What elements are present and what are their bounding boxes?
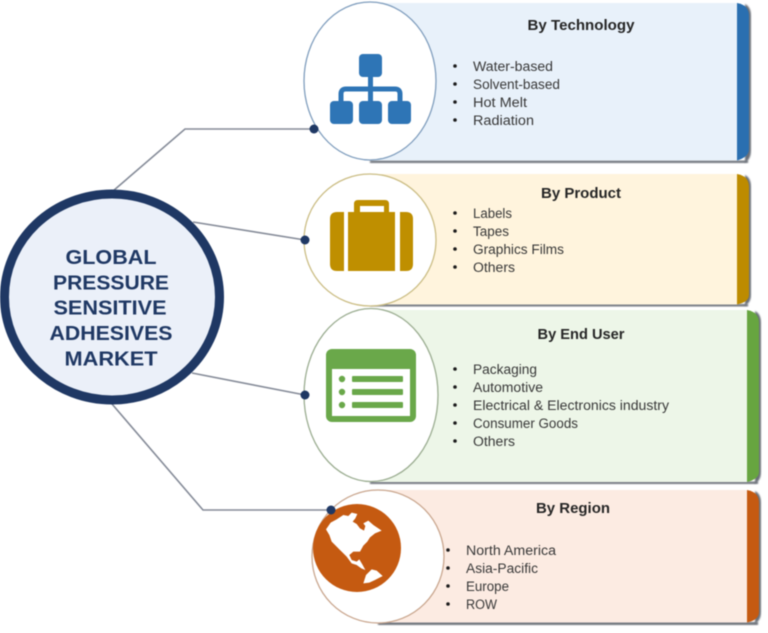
list: Others bbox=[473, 260, 515, 275]
list: Electrical & Electronics industry bbox=[473, 398, 669, 413]
list bbox=[453, 206, 564, 275]
connector: centre to By End User bbox=[192, 373, 305, 395]
panel: By Product bbox=[304, 174, 751, 306]
list: Hot Melt bbox=[473, 95, 527, 110]
heading: By Region bbox=[536, 500, 610, 517]
panel: By Technology bbox=[304, 2, 751, 163]
list: ROW bbox=[466, 597, 497, 612]
list: Labels bbox=[473, 206, 512, 221]
icon: globe bbox=[313, 504, 401, 592]
central title bbox=[50, 246, 172, 370]
accent bar bbox=[747, 310, 759, 482]
list: North America bbox=[466, 543, 557, 558]
list: Graphics Films bbox=[473, 242, 564, 257]
central circle bbox=[4, 194, 220, 400]
list bbox=[453, 362, 669, 449]
panel: By End User bbox=[304, 308, 761, 484]
central title: PRESSURE bbox=[53, 272, 169, 294]
heading: By Product bbox=[541, 185, 621, 202]
list: Tapes bbox=[473, 224, 509, 239]
list: Radiation bbox=[473, 113, 534, 128]
dot on By Product circle bbox=[300, 236, 310, 244]
accent bar bbox=[747, 490, 759, 622]
accent bar bbox=[737, 174, 749, 304]
icon circle bbox=[304, 2, 436, 160]
icon circle bbox=[304, 174, 436, 306]
accent bar bbox=[737, 3, 749, 160]
dot on By End User circle bbox=[300, 390, 310, 400]
list bbox=[446, 543, 557, 612]
heading: By Technology bbox=[528, 17, 635, 34]
icon: hierarchy bbox=[330, 54, 411, 124]
connector: centre to By Region bbox=[112, 404, 331, 510]
list bbox=[453, 59, 560, 128]
list: Automotive bbox=[473, 380, 543, 395]
icon: list window bbox=[326, 349, 416, 422]
icon circle bbox=[304, 308, 438, 482]
heading: By End User bbox=[538, 326, 625, 343]
dot on By Region circle bbox=[326, 506, 336, 514]
central title: MARKET bbox=[64, 348, 158, 370]
list: Europe bbox=[466, 579, 509, 594]
central title: ADHESIVES bbox=[50, 322, 172, 345]
central title: SENSITIVE bbox=[54, 296, 166, 320]
list: Others bbox=[473, 434, 515, 449]
list: Consumer Goods bbox=[473, 416, 578, 431]
central title: GLOBAL bbox=[66, 246, 156, 269]
list: Water-based bbox=[473, 59, 553, 74]
panel: By Region bbox=[312, 490, 761, 625]
connector: centre to By Technology bbox=[113, 129, 314, 191]
list: Solvent-based bbox=[473, 77, 560, 92]
list: Packaging bbox=[473, 362, 537, 377]
icon: briefcase bbox=[330, 200, 413, 271]
dot on By Technology circle bbox=[310, 124, 318, 134]
icon circle bbox=[312, 490, 444, 623]
list: Asia-Pacific bbox=[466, 561, 538, 576]
connector: centre to By Product bbox=[193, 222, 305, 240]
